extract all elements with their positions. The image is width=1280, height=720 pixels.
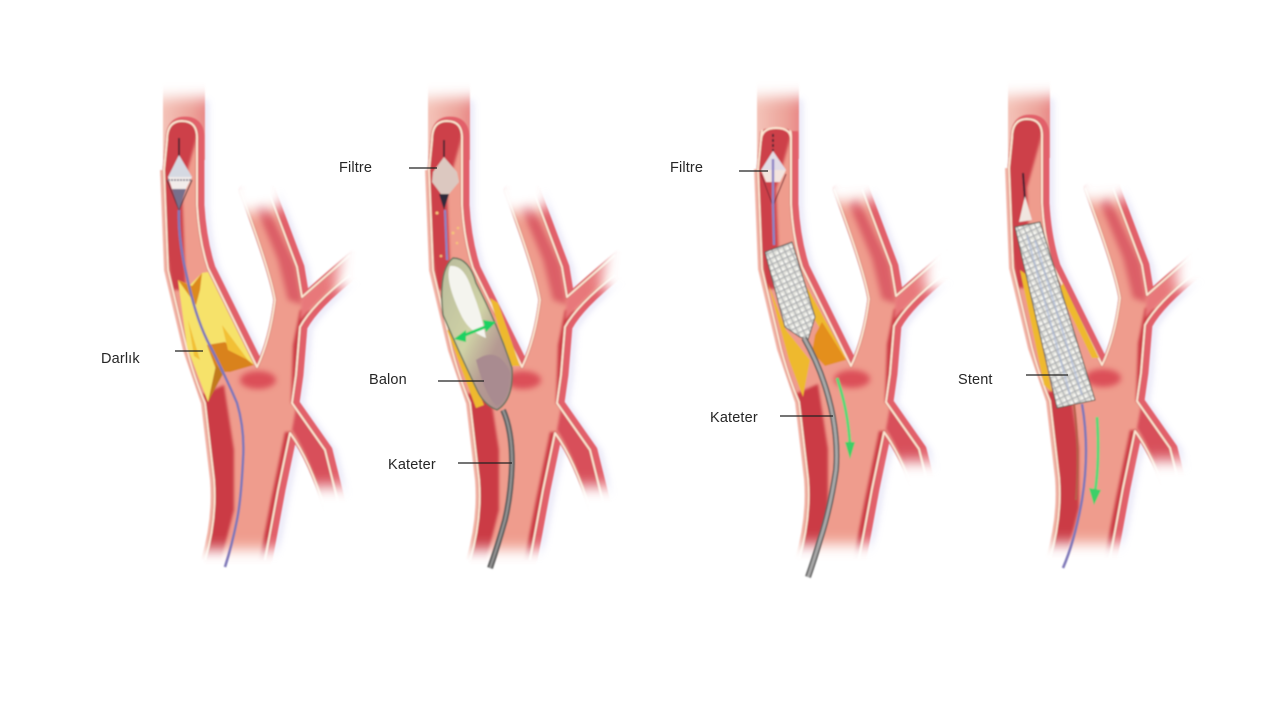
plaque strips 2 [447,298,520,408]
filter 3 [761,134,786,206]
panel 4: stent placed [1005,58,1204,568]
label: Filtre 1 [339,160,437,176]
label: Darlık [101,351,203,367]
wire 2 [445,210,447,260]
stent [1015,222,1095,408]
artery 2 [424,88,616,560]
label: Kateter 2: Kateter [710,410,758,426]
collapsed filter 4 [1019,173,1032,222]
label: Filtre 2: Filtre [670,160,703,176]
green arrow 3 [837,378,855,459]
label: Filtre 1: Filtre [339,160,372,176]
wires 4 [1063,404,1086,568]
label: Kateter 2 [710,410,833,426]
debris 2 [436,212,459,257]
balloon [442,258,512,410]
label: Balon [369,372,484,388]
catheter 3 [804,338,837,577]
green arrow 4 [1089,417,1101,505]
plaque 1 [178,272,254,402]
label: Kateter 1 [388,457,512,473]
filter 1 [167,138,192,210]
panel 1: stenosis with filter [160,60,359,567]
label: Filtre 2 [670,160,768,176]
panel 3: stent delivery [754,59,953,577]
catheter 2 [490,410,512,568]
filter 2 [432,140,459,210]
guide wire 1 [179,210,243,567]
wire 3 [773,205,774,245]
artery 4 [1004,86,1194,555]
stent delivery device [765,242,815,340]
label: Darlık: Darlık [101,351,140,367]
label: Stent: Stent [958,372,993,388]
artery 1 [159,88,350,560]
label: Balon: Balon [369,372,407,388]
green double arrow [454,320,496,342]
label: Kateter 1: Kateter [388,457,436,473]
plaque strips 4 [1020,270,1099,392]
artery 3 [753,87,942,556]
plaque strips 3 [768,283,846,397]
label: Stent [958,372,1068,388]
panel 2: balloon dilation [425,60,624,568]
